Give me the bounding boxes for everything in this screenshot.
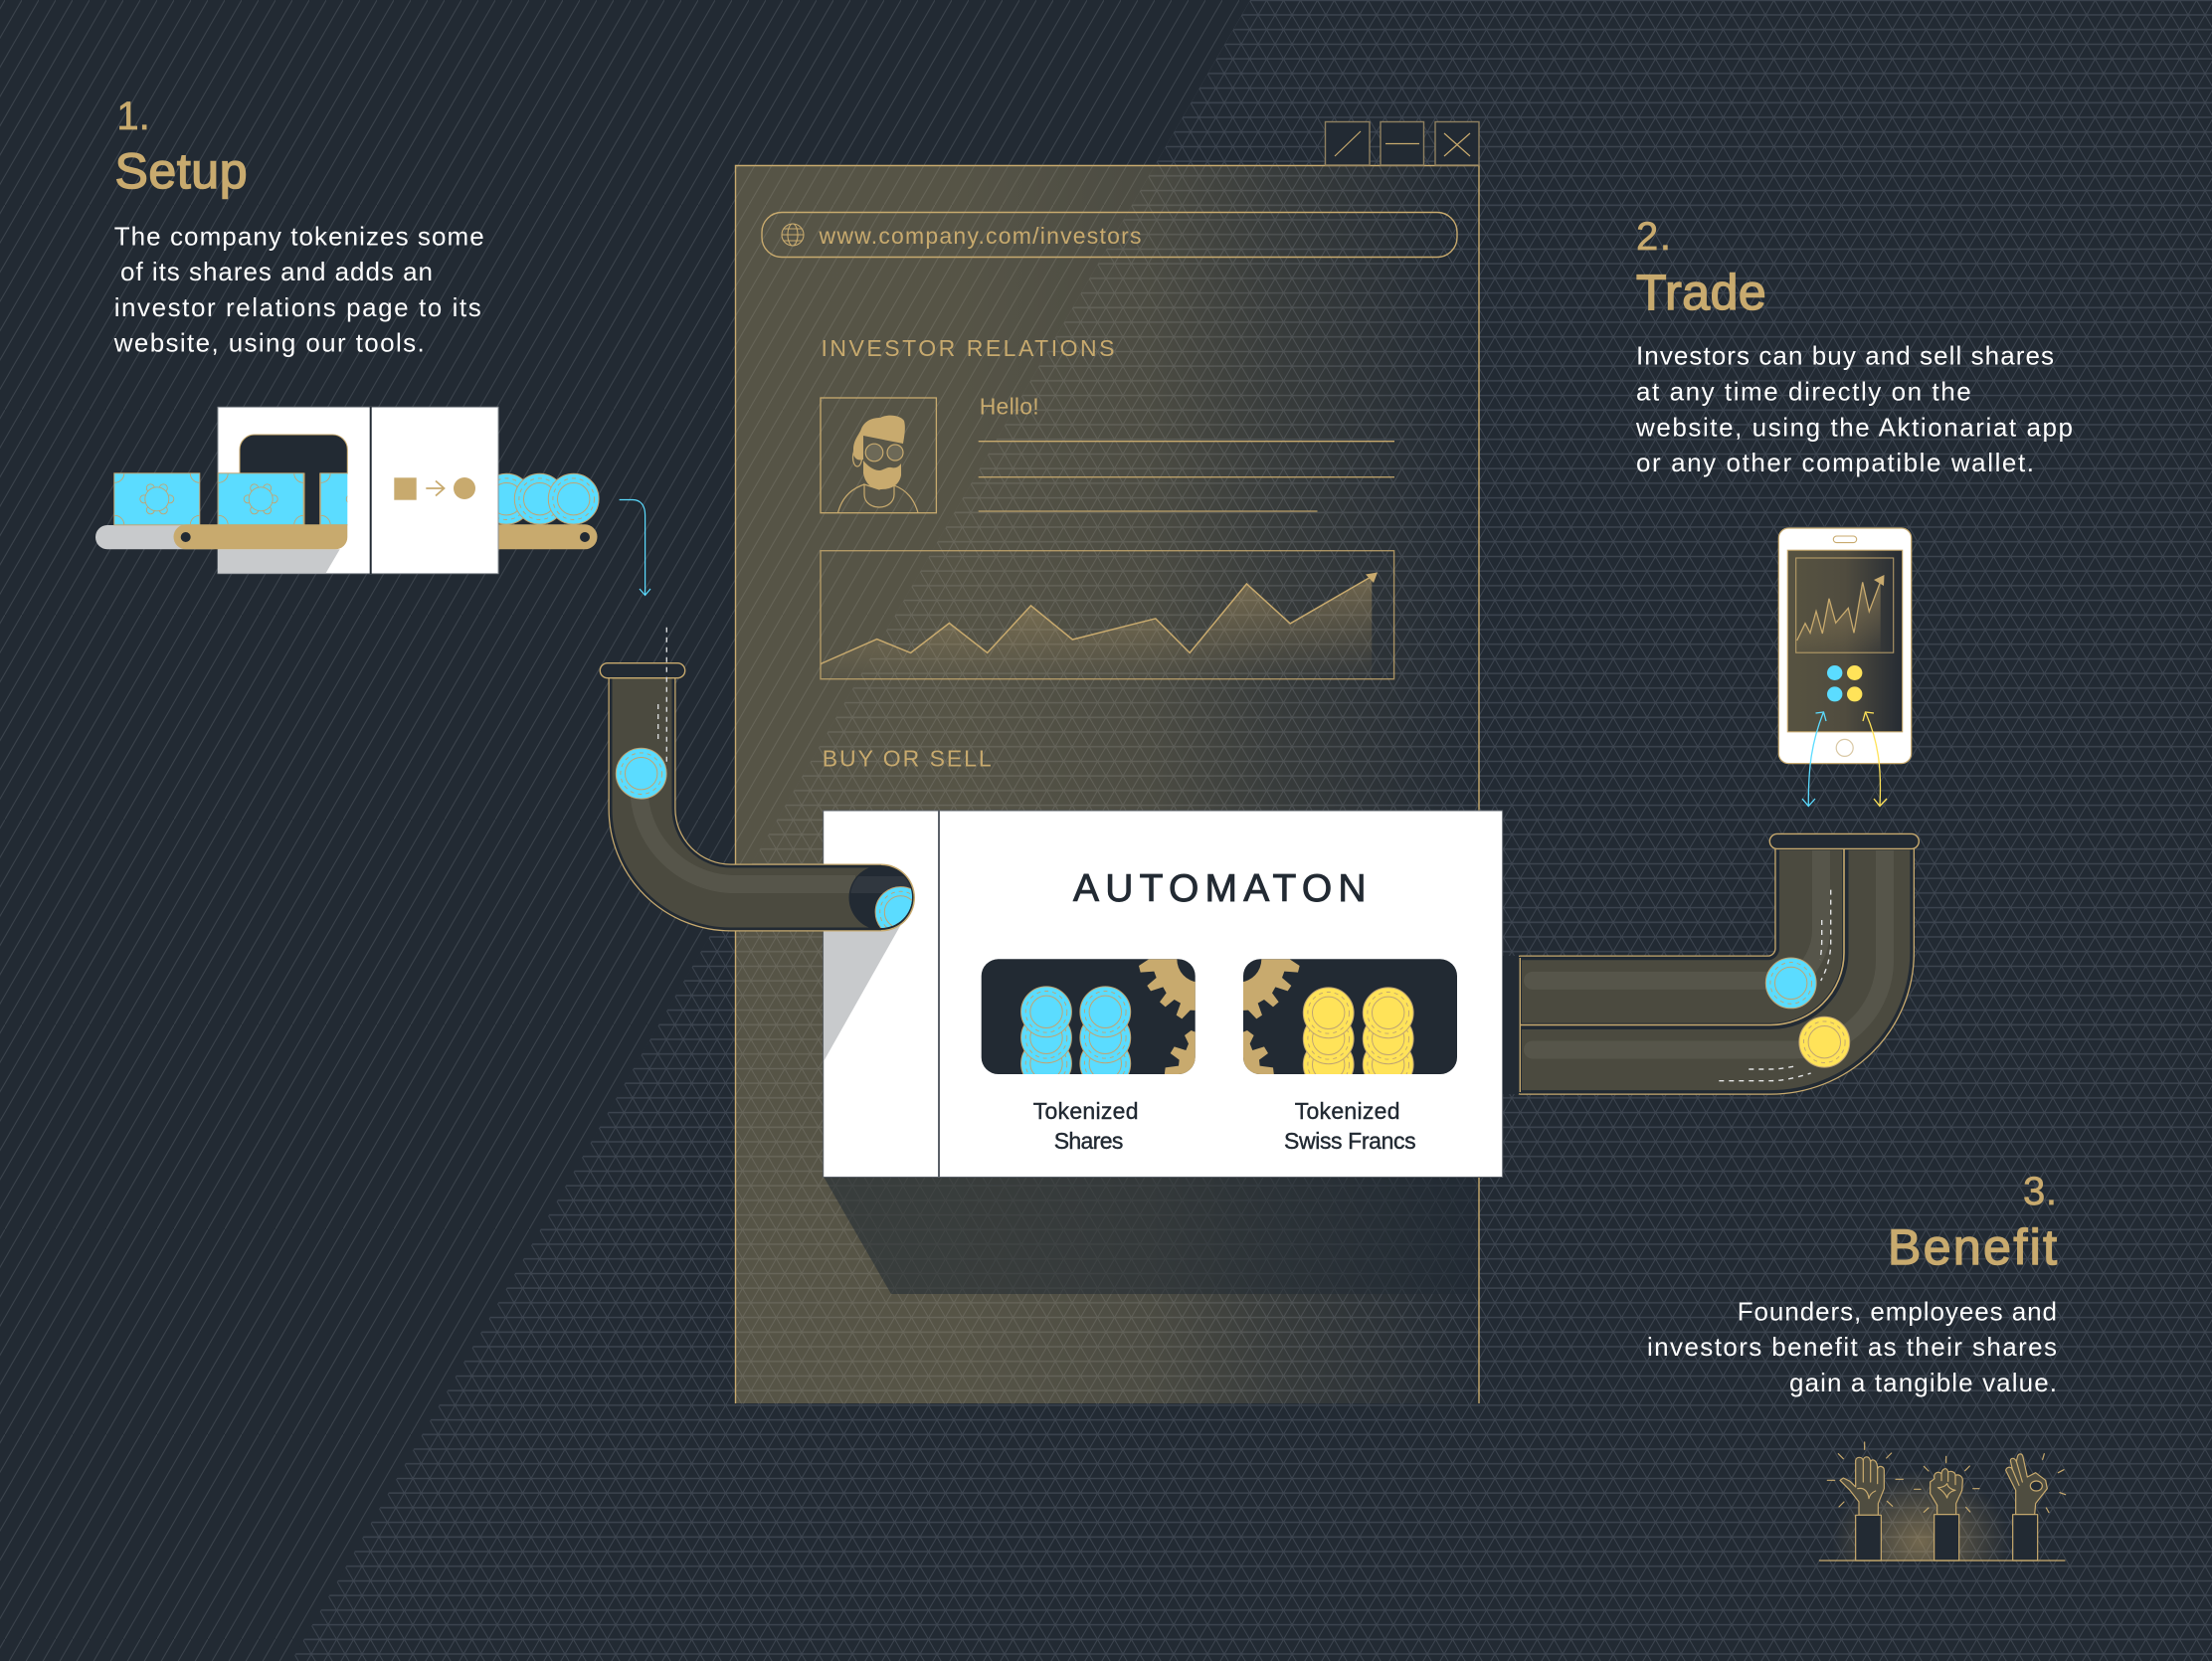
step 2 title and text: at any time directly on the: [1636, 376, 1971, 406]
fist: [1915, 1456, 1979, 1561]
step 1 title and text: of its shares and adds an: [120, 257, 433, 286]
pipe: trade double channel: [1503, 833, 1919, 1094]
panel: automaton: [824, 811, 1503, 1178]
motion dashes: [1719, 890, 1831, 1081]
share price chart: [821, 551, 1394, 679]
step 3 title and text: 3.: [2023, 1170, 2057, 1213]
share certificates: [114, 473, 200, 525]
illustration: tokenizing machine on conveyor: [95, 407, 599, 574]
pipe mouth: [849, 865, 913, 930]
label: tokenized shares: Tokenized: [1033, 1098, 1138, 1124]
label: tokenized swiss francs: [1284, 1098, 1416, 1154]
investor portrait: [821, 398, 936, 513]
label: tokenized swiss francs: Swiss Francs: [1284, 1128, 1416, 1154]
heading: buy or sell: BUY OR SELL: [823, 746, 992, 772]
step 1 title and text: 1.: [116, 94, 150, 138]
output coins: [499, 473, 600, 525]
stamping press: [240, 435, 347, 525]
output conveyor: [498, 524, 597, 549]
arrow: setup to pipe: [620, 499, 650, 595]
pipe highlights: [1533, 850, 1885, 1050]
step 3 title and text: [1647, 1170, 2057, 1397]
arrow: yellow exchange: [1863, 712, 1887, 806]
greeting text: Hello!: [980, 394, 1039, 420]
label: tokenized shares: Shares: [1054, 1128, 1123, 1154]
step 1 title and text: investor relations page to its: [114, 292, 481, 322]
placeholder text lines: [979, 442, 1394, 511]
ok hand: [2006, 1454, 2066, 1561]
card: tokenized shares: [981, 959, 1196, 1074]
open hand: [1827, 1442, 1903, 1561]
machine box: [218, 407, 498, 574]
automaton title: AUTOMATON: [1073, 867, 1367, 910]
motion dashes: [658, 628, 666, 766]
pipe flange: [600, 663, 685, 678]
step 2 title and text: or any other compatible wallet.: [1636, 448, 2034, 477]
channel divider: [1520, 848, 1846, 1027]
flange: [1769, 833, 1919, 848]
step 1 title and text: website, using our tools.: [113, 328, 425, 358]
ground line: [1819, 1559, 2065, 1563]
window frame: [736, 165, 1479, 1403]
window tint: [736, 165, 1479, 1403]
address bar: [762, 213, 1457, 257]
gold conveyor belt: [173, 524, 347, 549]
label: tokenized swiss francs: Tokenized: [1295, 1098, 1400, 1124]
step 2 title and text: 2.: [1636, 215, 1671, 259]
illustration: raised hands: [1819, 1442, 2066, 1561]
step 1 title and text: Setup: [115, 143, 247, 199]
window control buttons: [1325, 121, 1479, 165]
cyan coin: [1765, 958, 1816, 1009]
address bar: www.company.com/investors: [818, 223, 1142, 249]
step 3 title and text: investors benefit as their shares: [1647, 1332, 2057, 1362]
step 2 title and text: Trade: [1636, 265, 1766, 320]
step 3 title and text: Founders, employees and: [1738, 1297, 2057, 1327]
square to circle icon: [394, 477, 475, 500]
arrow: cyan exchange: [1802, 712, 1826, 806]
step 2 title and text: [1635, 215, 2073, 477]
icon: smartphone with trading app: [1778, 528, 1912, 764]
yellow coin: [1799, 1016, 1850, 1067]
panel: browser window: [736, 121, 1479, 1403]
automaton drop shadow: [824, 1177, 1479, 1294]
step 2 title and text: website, using the Aktionariat app: [1635, 412, 2073, 442]
heading: investor relations: INVESTOR RELATIONS: [822, 335, 1114, 361]
input conveyor belt: [95, 525, 225, 549]
card: tokenized swiss francs: [1243, 959, 1457, 1074]
pipe: setup into automaton: [600, 628, 926, 937]
token coin: [616, 748, 666, 799]
label: tokenized shares: [1033, 1098, 1138, 1154]
step 1 title and text: The company tokenizes some: [114, 221, 484, 251]
pipe cast shadow: [824, 923, 902, 1061]
step 1 title and text: [113, 94, 484, 358]
step 2 title and text: Investors can buy and sell shares: [1636, 341, 2054, 371]
step 3 title and text: gain a tangible value.: [1789, 1368, 2057, 1397]
step 3 title and text: Benefit: [1888, 1219, 2057, 1275]
